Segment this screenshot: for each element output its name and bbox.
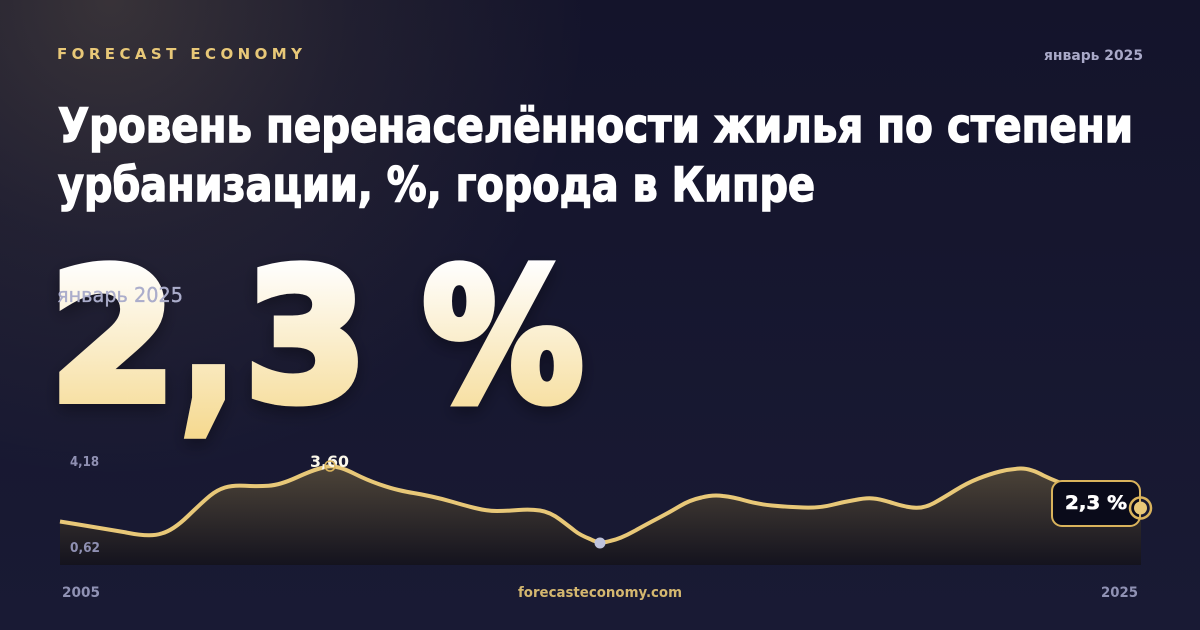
title (58, 99, 1133, 213)
y-axis max: 4,18 (70, 455, 99, 470)
area chart (60, 452, 1151, 565)
current point marker (1130, 498, 1151, 518)
date label top right: январь 2025 (1044, 48, 1143, 64)
x-axis start year: 2005 (62, 585, 100, 601)
area fill (60, 466, 1141, 565)
peak label: 3,60 (310, 452, 349, 471)
hero date label: январь 2025 (57, 283, 183, 307)
hero value: 2 (50, 233, 176, 442)
y-axis min: 0,62 (70, 541, 100, 556)
current value callout (1052, 481, 1140, 526)
brand label: FORECAST ECONOMY (57, 45, 303, 63)
line (60, 466, 1075, 542)
hero value: 3 (245, 233, 367, 442)
title: урбанизации, %, города в Кипре (58, 158, 815, 213)
hero value: , (181, 225, 236, 452)
hero value (50, 225, 583, 452)
source url: forecasteconomy.com (518, 585, 682, 601)
hero value: % (423, 233, 583, 442)
current value callout: 2,3 % (1065, 492, 1127, 514)
x-axis end year: 2025 (1101, 585, 1138, 601)
peak marker (325, 461, 335, 471)
minimum marker (594, 538, 606, 548)
